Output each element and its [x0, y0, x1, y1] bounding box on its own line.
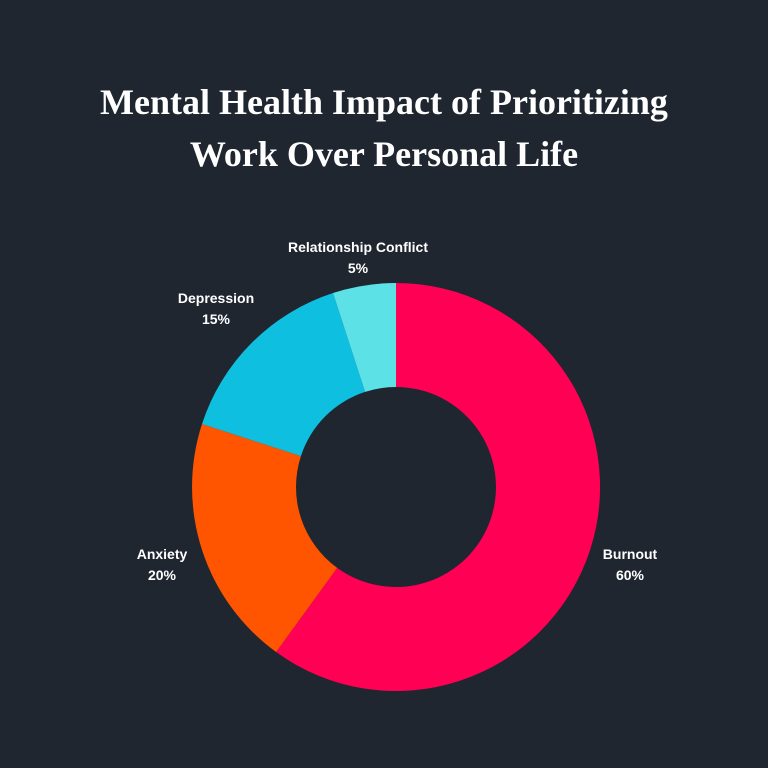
label: anxiety	[137, 546, 187, 583]
label: anxiety: 20%	[148, 567, 177, 583]
title: Mental Health Impact of Prioritizing	[100, 82, 668, 122]
segment: anxiety	[192, 424, 337, 652]
segment: burnout	[276, 283, 600, 691]
label: depression	[178, 290, 254, 327]
title: Work Over Personal Life	[190, 134, 578, 174]
label: depression: 15%	[202, 311, 231, 327]
segment: depression	[202, 293, 365, 456]
label: burnout: 60%	[616, 567, 645, 583]
label: burnout: Burnout	[603, 546, 658, 562]
title	[100, 82, 668, 174]
label: anxiety: Anxiety	[137, 546, 187, 562]
segment: relationship conflict	[333, 283, 396, 392]
label: depression: Depression	[178, 290, 254, 306]
label: burnout	[603, 546, 658, 583]
label: relationship conflict	[288, 239, 428, 276]
labels	[137, 239, 658, 583]
label: relationship conflict: 5%	[348, 260, 369, 276]
donut chart	[192, 283, 600, 691]
label: relationship conflict: Relationship Conflict	[288, 239, 428, 255]
